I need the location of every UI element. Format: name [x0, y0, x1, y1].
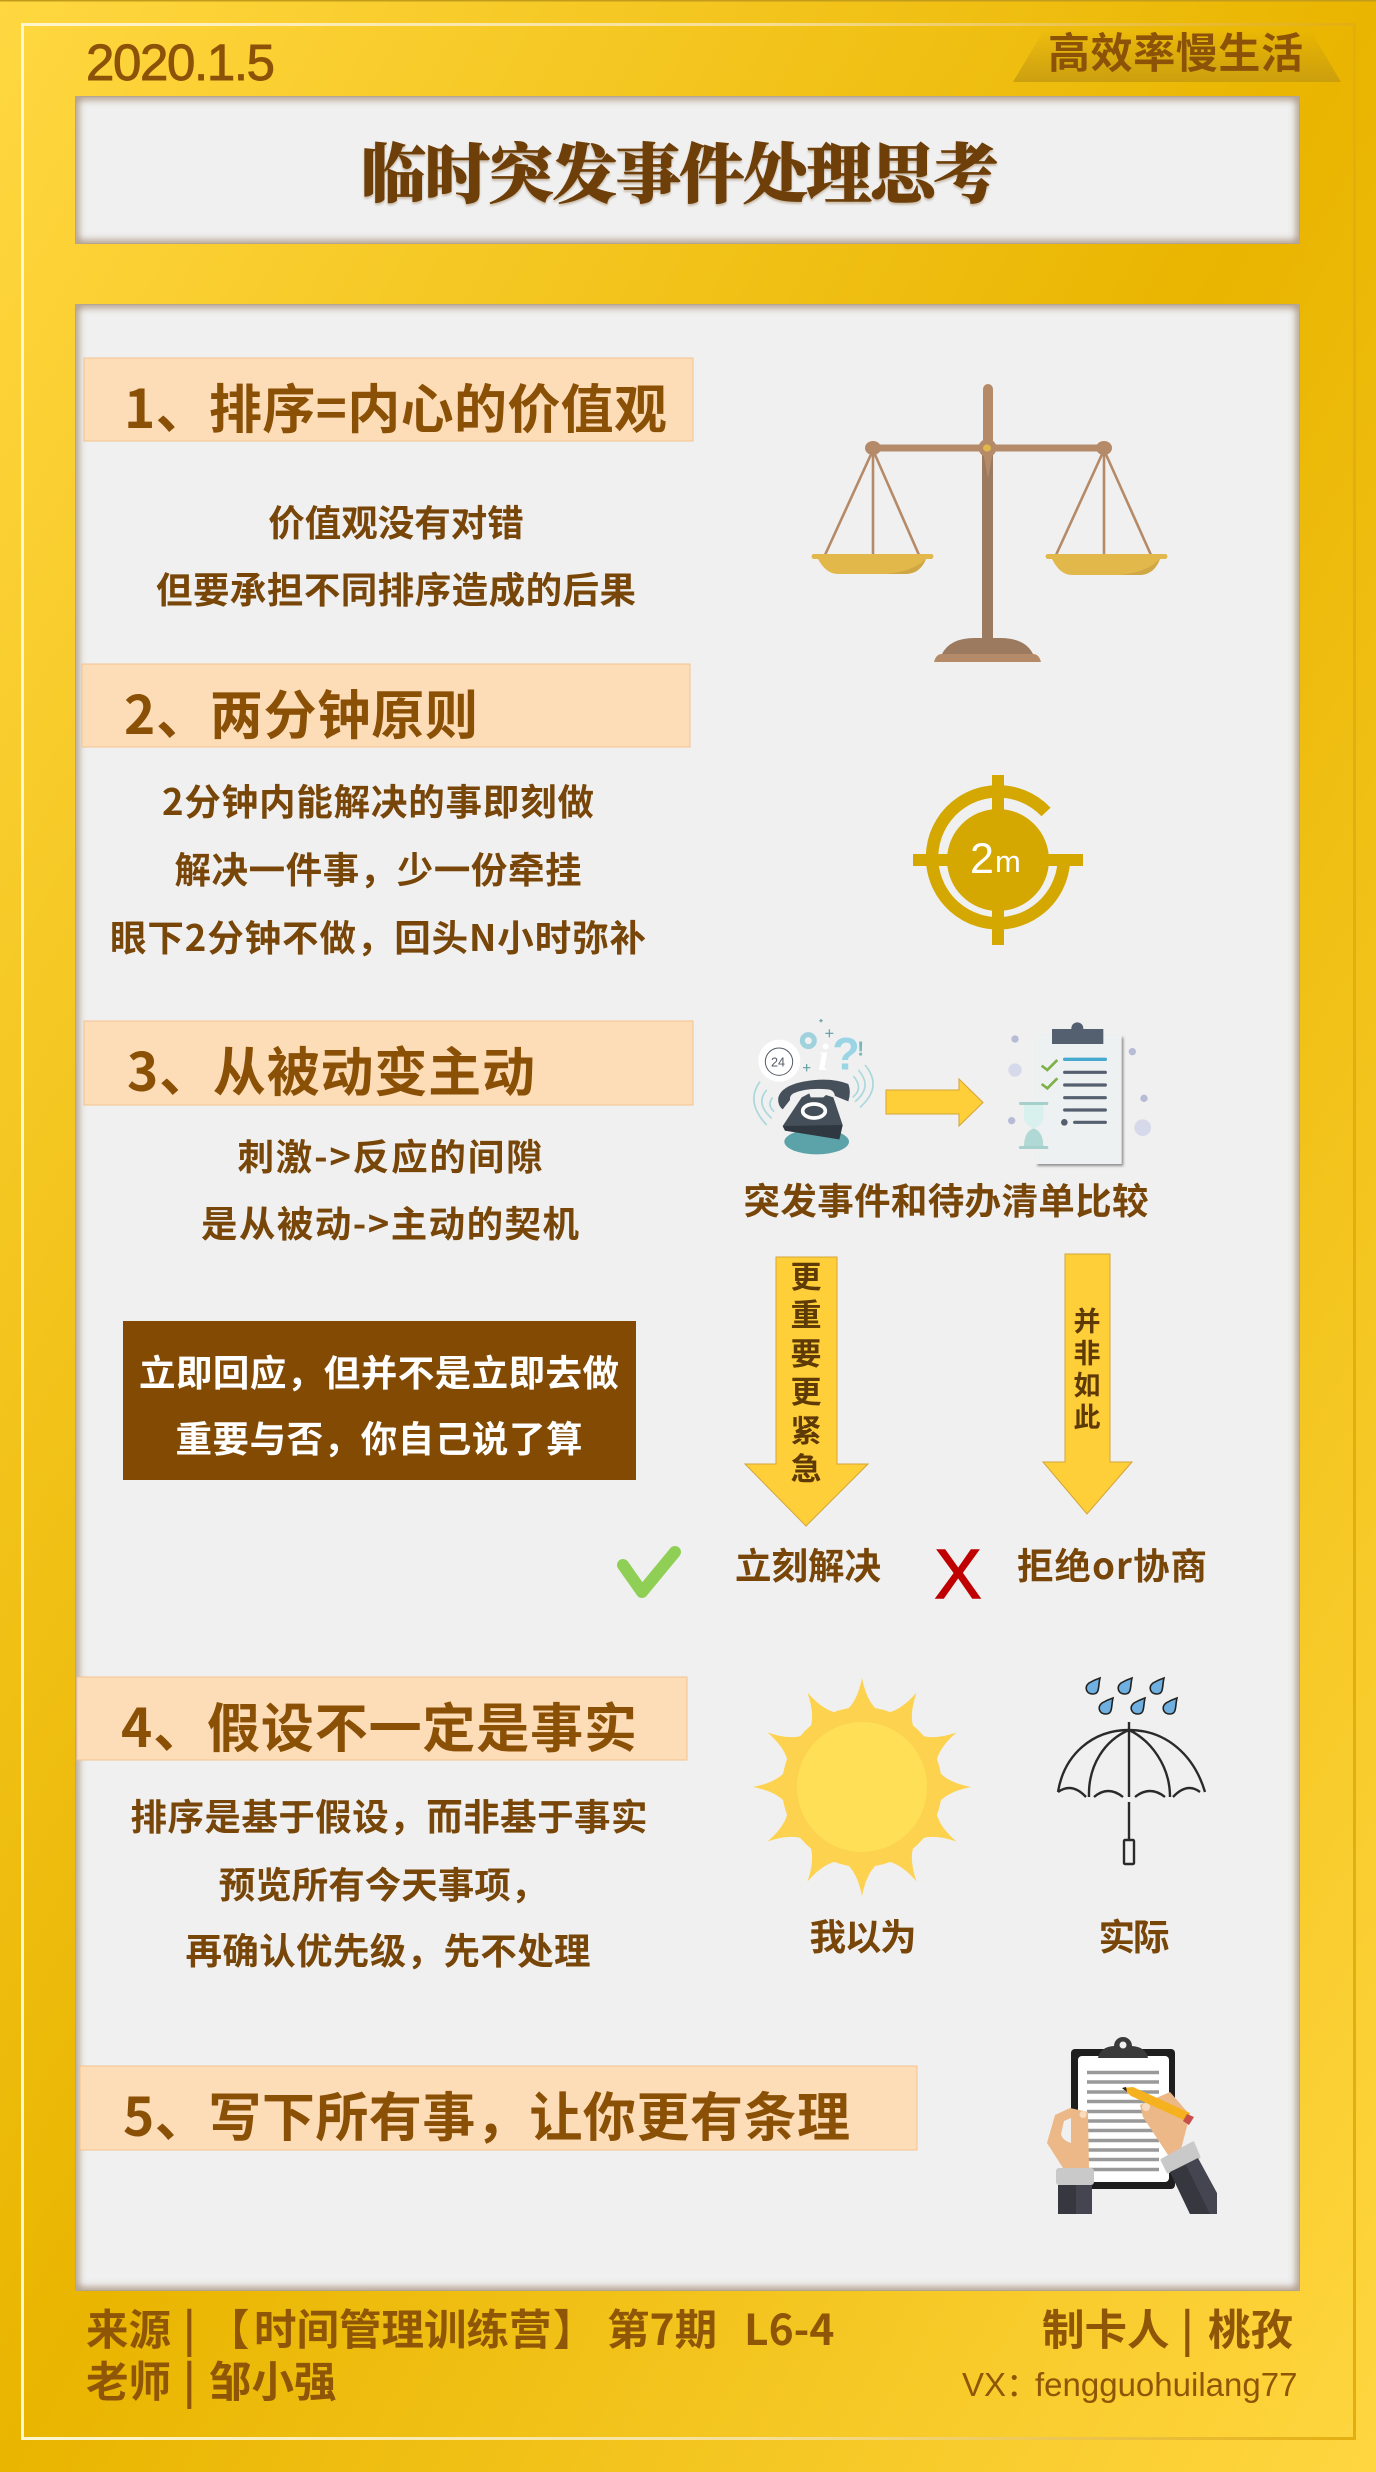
section 1 header: 1、排序=内心的价值观: [124, 368, 667, 444]
title: 临时突发事件处理思考: [361, 122, 999, 216]
section 3 text: 刺激->反应的间隙: [238, 1128, 542, 1181]
footer: source: 第7期: [607, 2297, 717, 2358]
section 3 text: [201, 1128, 580, 1248]
icon: umbrella and rain: [1058, 1678, 1205, 1864]
section 4 text: 预览所有今天事项，: [219, 1856, 547, 1909]
section 4 text: 排序是基于假设，而非基于事实: [130, 1788, 648, 1841]
arrow: more important: 要: [790, 1329, 822, 1374]
callout: brown box: 重要与否，你自己说了算: [176, 1410, 582, 1463]
section 3 text: 是从被动->主动的契机: [201, 1195, 580, 1248]
footer: card maker: |: [1181, 2297, 1194, 2358]
outcome: solve now: 立刻解决: [735, 1537, 881, 1590]
footer: teacher: 邹小强: [209, 2349, 337, 2410]
arrow: not so: [1043, 1254, 1132, 1514]
icon: ringing phone: ?: [832, 1028, 860, 1079]
footer: teacher: 老师: [86, 2349, 171, 2410]
footer: wechat id: VX：: [962, 2366, 1039, 2403]
icon: writing on clipboard: [1047, 2037, 1217, 2214]
brand tag: 高效率慢生活: [1048, 20, 1303, 81]
footer: teacher: |: [183, 2349, 196, 2410]
label: I thought: 我以为: [810, 1908, 916, 1961]
icon: balance scale: [812, 384, 1168, 662]
arrow: more important: 紧: [790, 1406, 822, 1451]
label: reality: 实际: [1098, 1908, 1170, 1961]
date: 2020.1.5: [86, 34, 275, 91]
section 2 text: 解决一件事，少一份牵挂: [174, 841, 582, 894]
comparison label: 突发事件和待办清单比较: [744, 1172, 1148, 1225]
section 1 text: 价值观没有对错: [268, 494, 524, 547]
section 2 text: 2分钟内能解决的事即刻做: [162, 773, 594, 826]
icon: checklist: [1008, 1022, 1151, 1166]
outcome: refuse or negotiate: 拒绝or协商: [1017, 1537, 1207, 1590]
arrow: not so: 此: [1074, 1396, 1100, 1435]
arrow: more important: [745, 1252, 868, 1526]
icon: two minute target: 2: [970, 835, 994, 883]
section 2 text: 眼下2分钟不做，回头N小时弥补: [110, 909, 646, 962]
icon: sun: [753, 1678, 971, 1896]
section 2 text: [110, 773, 646, 962]
arrow: phone to checklist: [886, 1079, 983, 1126]
footer: wechat id: fengguohuilang77: [1035, 2366, 1297, 2403]
icon: two minute target: m: [995, 844, 1021, 879]
section 1 text: [156, 494, 636, 614]
section 3 header: [84, 1021, 693, 1107]
footer: source: L6-4: [744, 2297, 834, 2358]
section 2 header: [82, 664, 690, 750]
footer: source: |: [183, 2297, 196, 2358]
section 4 text: [130, 1788, 648, 1975]
icon: ringing phone: 24: [771, 1056, 785, 1070]
main content panel: [75, 304, 1300, 2291]
footer: source: 来源: [86, 2297, 171, 2358]
arrow: not so: 非: [1074, 1332, 1100, 1371]
section 2 header: 2、两分钟原则: [124, 674, 478, 750]
arrow: more important: 重: [790, 1290, 822, 1335]
footer: source: 】: [553, 2297, 596, 2358]
callout: brown box: [123, 1321, 636, 1480]
callout: brown box: 立即回应，但并不是立即去做: [139, 1344, 619, 1397]
footer: source: 【: [207, 2297, 250, 2358]
icon: ringing phone: i: [818, 1037, 829, 1079]
arrow: more important: 更: [790, 1367, 822, 1412]
arrow: not so: 如: [1074, 1364, 1100, 1403]
section 3 header: 3、从被动变主动: [127, 1031, 535, 1107]
icon: two minute target: [913, 775, 1083, 945]
icon: ringing phone: [754, 1019, 873, 1154]
icon: check mark: [623, 1552, 675, 1592]
section 5 header: 5、写下所有事，让你更有条理: [123, 2076, 850, 2152]
section 1 text: 但要承担不同排序造成的后果: [156, 561, 636, 614]
icon: cross: X: [935, 1535, 981, 1613]
footer: card maker: 桃孜: [1208, 2297, 1293, 2358]
arrow: more important: 更: [790, 1252, 822, 1297]
arrow: more important: 急: [790, 1444, 822, 1489]
arrow: not so: 并: [1074, 1300, 1100, 1339]
section 4 header: 4、假设不一定是事实: [121, 1687, 637, 1763]
icon: ringing phone: !: [857, 1037, 864, 1060]
title panel: [75, 96, 1300, 244]
footer: source: 时间管理训练营: [254, 2297, 552, 2358]
section 4 text: 再确认优先级，先不处理: [186, 1922, 590, 1975]
footer: card maker: 制卡人: [1042, 2297, 1170, 2358]
